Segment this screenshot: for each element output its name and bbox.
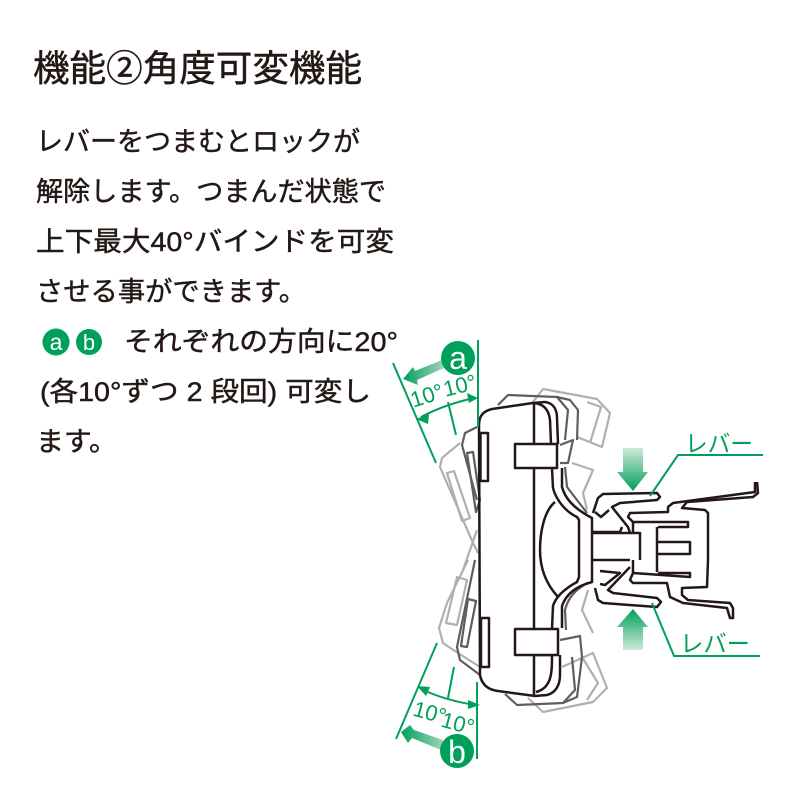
angle gauge b: 10° <box>439 707 477 740</box>
callout: upper lever label <box>650 431 763 496</box>
callout: lower lever label: レバー <box>680 631 750 658</box>
neck curves <box>552 468 579 629</box>
text block: description: 上下最大40°バインドを可変 <box>36 227 394 257</box>
arrow: lever press down <box>617 448 648 491</box>
angle gauge a: a <box>449 340 467 376</box>
side clips <box>480 433 488 481</box>
text block: description: ます。 <box>36 427 117 457</box>
diagram: upper lever and bracket <box>593 482 758 572</box>
diagram: lightest ghost outline of headlamp <box>439 389 610 712</box>
text block: description <box>36 127 398 457</box>
text block: description: させる事ができます。 <box>36 277 306 307</box>
text block: description: レバーをつまむとロックが <box>36 127 360 157</box>
icon: inline badges a and b: a <box>50 329 63 355</box>
angle gauge a <box>393 340 479 463</box>
callout: upper lever label: レバー <box>685 431 753 458</box>
angle gauge b <box>396 643 480 770</box>
callout: lower lever label <box>652 603 760 658</box>
diagram: mid ghost outline of headlamp <box>457 395 587 705</box>
inner seams <box>533 403 535 696</box>
angle gauge a: 10° <box>407 378 447 413</box>
angle gauge b: b <box>448 734 466 770</box>
dome <box>540 502 558 597</box>
text block: description: (各10°ずつ 2 段回) 可変し <box>40 377 371 407</box>
angle gauge a: 10° <box>441 369 479 402</box>
diagram: headlamp body <box>479 402 592 696</box>
title: 機能②角度可変機能 <box>33 48 362 89</box>
straps <box>515 444 557 468</box>
icon: inline badges a and b: b <box>83 330 95 355</box>
outer shell <box>479 402 560 696</box>
angle gauge b: 10° <box>411 696 449 729</box>
text block: description: それぞれの方向に20° <box>124 327 398 357</box>
arrow: lever press up <box>617 609 648 650</box>
text block: description: 解除します。つまんだ状態で <box>36 177 386 207</box>
icon: inline badges a and b <box>42 328 102 356</box>
diagram: lower lever and bracket <box>595 560 733 618</box>
